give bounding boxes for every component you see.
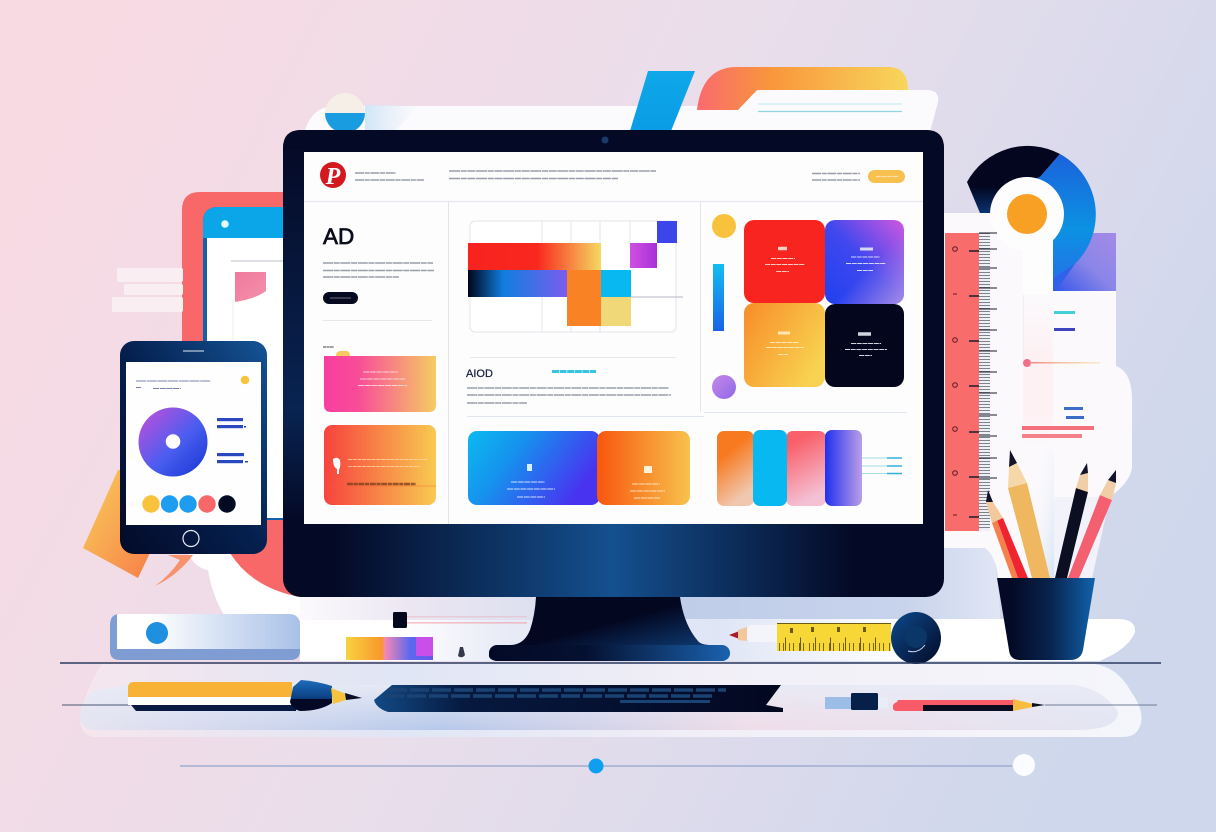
light blue gradient swatch <box>365 105 420 130</box>
left pencil <box>62 680 362 711</box>
phone yellow dot <box>241 376 249 384</box>
blue dot <box>146 622 168 644</box>
orange speech tail <box>155 555 193 586</box>
round knob <box>891 612 941 664</box>
blue semicircle tab <box>325 93 365 133</box>
black square <box>393 612 407 628</box>
donut chart <box>138 408 208 476</box>
orange card <box>324 425 436 505</box>
black pencil <box>1055 463 1088 578</box>
AD body text <box>323 263 434 277</box>
blue vertical bar <box>713 264 724 331</box>
tile: orange <box>744 303 825 387</box>
monitor <box>283 130 944 597</box>
vertical ruler <box>945 233 997 531</box>
button label <box>330 297 351 299</box>
tile: black <box>825 304 904 387</box>
bar chart <box>468 221 683 332</box>
yellow paper behind phone <box>83 470 149 578</box>
chart footer divider <box>470 356 676 358</box>
AIOD body text <box>467 388 671 403</box>
divider <box>323 320 432 322</box>
phone header text <box>136 381 211 388</box>
folder tab <box>697 67 908 110</box>
blue ribbon <box>630 71 695 131</box>
slider <box>180 754 1035 776</box>
orange dot <box>1007 194 1047 234</box>
phone colour dots <box>142 495 236 513</box>
AD heading: AD <box>323 224 354 249</box>
background tablet <box>203 207 292 520</box>
purple dot <box>712 375 736 399</box>
lavender area below ruler <box>680 540 1000 619</box>
black button <box>323 292 358 304</box>
tiny label <box>323 346 334 348</box>
small cursor mark <box>458 647 465 657</box>
phone screen <box>126 362 261 525</box>
paper lines <box>758 104 902 112</box>
yellow tape measure pencil <box>729 623 891 651</box>
cyan subheading <box>552 370 596 373</box>
lower desk <box>80 664 1142 737</box>
white bars left <box>112 268 183 312</box>
colour stripes <box>717 430 902 506</box>
gauge ring <box>967 146 1096 295</box>
webcam <box>602 136 608 144</box>
back desk shelf <box>300 619 1135 661</box>
orange gradient card <box>597 431 690 505</box>
keyboard <box>374 685 783 712</box>
left red backing shape <box>182 192 300 600</box>
pink note <box>235 272 266 302</box>
thin guide <box>1022 270 1024 362</box>
phone legend bars <box>217 418 248 463</box>
white slider dot <box>1013 754 1035 776</box>
back paper sheet <box>305 90 938 133</box>
pencil cup pencils <box>986 450 1116 578</box>
header text <box>355 171 860 180</box>
purple square <box>1053 233 1116 291</box>
red guide lines <box>407 616 527 623</box>
yellow dot <box>712 214 736 238</box>
tan pencil <box>1008 450 1050 578</box>
Pinterest logo <box>320 162 346 190</box>
colour swatch <box>346 637 433 660</box>
AIOD heading: AIOD <box>466 368 493 380</box>
pink column <box>1023 300 1053 445</box>
phone tablet <box>120 341 267 554</box>
red pencil left <box>986 490 1028 578</box>
red pencil right <box>1068 470 1116 578</box>
pale blue column <box>1030 450 1054 578</box>
yellow header button <box>868 170 905 183</box>
pink card <box>324 351 436 412</box>
desk line <box>60 662 1161 664</box>
blue slider dot <box>588 758 604 774</box>
blue gradient card <box>468 431 600 505</box>
band under monitor left <box>224 597 540 620</box>
button label <box>876 176 898 178</box>
right panel marks <box>1022 311 1100 438</box>
lower pale block <box>1054 497 1110 578</box>
tile: red <box>744 220 825 303</box>
white pin mark <box>333 458 340 474</box>
Pinterest logo: P <box>325 164 341 190</box>
pencil cup <box>997 578 1095 660</box>
monitor stand <box>489 597 730 661</box>
right white panel <box>944 213 1132 578</box>
tile: blue purple <box>825 220 904 304</box>
small eraser item <box>825 693 888 710</box>
right pen <box>893 699 1157 711</box>
home button <box>183 530 199 546</box>
white blob under tablet <box>188 553 300 615</box>
eraser block <box>110 614 300 660</box>
screen <box>304 152 923 524</box>
